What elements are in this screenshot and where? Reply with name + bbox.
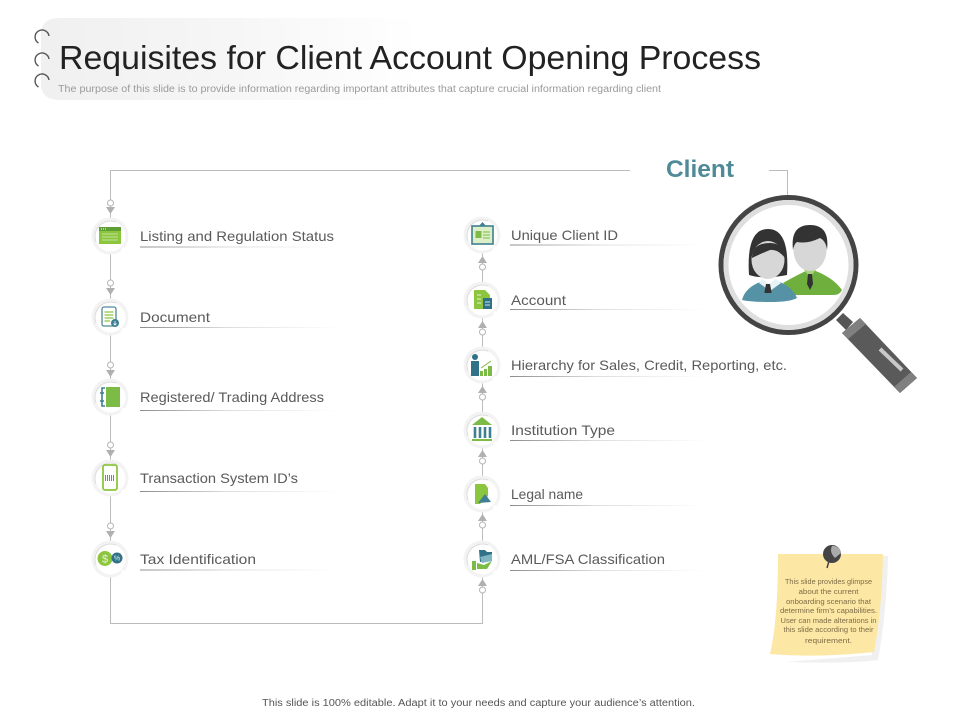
- icon: dollar and percent coins: $: [102, 554, 108, 566]
- label: Document: Document: [140, 309, 210, 325]
- title: Requisites for Client Account Opening Process: [59, 39, 761, 76]
- label: Tax Identification: Tax Identification: [140, 551, 256, 567]
- magnifier handle: [836, 313, 917, 393]
- icon: id board: [472, 222, 493, 244]
- icon: document and calculator: [474, 290, 492, 309]
- note text: This slide provides glimpse: [785, 578, 872, 586]
- arrows and nodes: right column: [478, 256, 487, 593]
- icon: magnifying glass with two people: [721, 198, 917, 393]
- icon: push pin: [823, 545, 841, 568]
- item: Document: [92, 298, 128, 336]
- icon: legal document and gavel: [475, 484, 491, 504]
- icon: presenter with bar chart: [471, 354, 492, 376]
- label: Registered/Trading Address: Registered/ Trading Address: [140, 389, 324, 405]
- item: Institution Type: [464, 412, 500, 448]
- icon: notebook spiral rings: [35, 30, 49, 87]
- label: Hierarchy: Hierarchy for Sales, Credit, Reporting, etc.: [511, 357, 787, 373]
- man: [783, 225, 842, 295]
- footer note: This slide is 100% editable. Adapt it to your needs and capture your audience’s attention.: [262, 698, 695, 709]
- icon: dollar and percent coins: %: [114, 556, 120, 562]
- label: Listing and Regulation Status: Listing and Regulation Status: [140, 228, 334, 244]
- subtitle: The purpose of this slide is to provide information regarding important attributes that capture crucial information regarding client: [58, 84, 661, 95]
- icon: address book: [100, 387, 120, 407]
- label: Institution Type: Institution Type: [511, 422, 615, 438]
- item: Registered/Trading Address: [92, 378, 128, 416]
- icon: dollar and percent coins: [98, 551, 122, 566]
- note text: [780, 578, 877, 645]
- label: Legal name: Legal name: [511, 486, 583, 502]
- note shadow: [785, 556, 888, 663]
- icon: listing window: [99, 227, 121, 244]
- sticky note: [770, 545, 888, 663]
- heading: Client: Client: [666, 156, 734, 183]
- note text: onboarding scenario that: [786, 598, 871, 606]
- note paper: [770, 554, 883, 656]
- note text: about the current: [798, 588, 859, 596]
- connector line: main loop: [110, 170, 788, 624]
- note text: requirement.: [805, 637, 852, 645]
- item: Hierarchy: [464, 346, 500, 384]
- label: Unique Client ID: Unique Client ID: [511, 227, 618, 243]
- item: Listing and Regulation Status: [92, 218, 128, 254]
- item: Unique Client ID: [464, 216, 500, 254]
- label: Account: Account: [511, 292, 566, 308]
- icon: phone barcode: [103, 465, 117, 490]
- header band: [41, 18, 420, 100]
- item: AML/FSA Classification: [464, 540, 500, 578]
- item: Transaction System ID's: [92, 460, 128, 496]
- arrows and nodes: left column: [106, 200, 115, 538]
- label: AML/FSA Classification: AML/FSA Classification: [511, 551, 665, 567]
- note text: User can made alterations in: [780, 617, 877, 625]
- label: Transaction System ID's: Transaction System ID’s: [140, 470, 298, 486]
- woman: [742, 229, 797, 302]
- icon: document download: [102, 307, 119, 327]
- item: Tax Identification: [92, 540, 128, 578]
- icon: hand holding folder: [472, 550, 492, 570]
- item: Account: [464, 282, 500, 318]
- note text: determine firm’s capabilities.: [780, 607, 877, 615]
- magnifier lens: [721, 198, 856, 332]
- item: Legal name: [464, 476, 500, 512]
- note text: this slide according to their: [784, 626, 874, 634]
- icon: bank building: [472, 417, 492, 441]
